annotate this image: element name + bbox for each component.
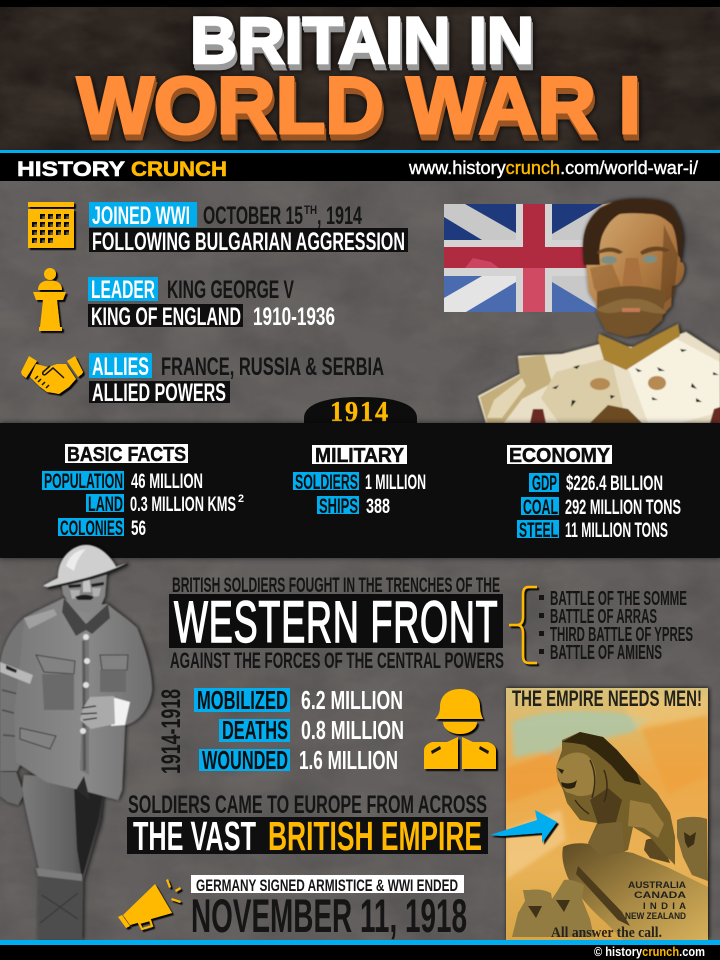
line below: AGAINST THE FORCES OF THE CENTRAL POWERS (170, 648, 504, 673)
economy: GDP (532, 472, 557, 495)
basic facts (42, 444, 244, 540)
basic facts: COLONIES (60, 517, 123, 540)
header banner (0, 0, 720, 151)
icon: lectern speaker (33, 268, 66, 331)
armband (0, 662, 33, 684)
military: 388 (366, 495, 390, 518)
buttons (80, 634, 90, 734)
economy: $226.4 BILLION (566, 472, 663, 495)
eyes and brows (597, 246, 670, 286)
dominions list: CANADA (634, 890, 686, 901)
fact: leader: 1910-1936 (253, 303, 335, 331)
hair (583, 199, 683, 265)
footer (0, 940, 720, 960)
portrait: King George V (478, 199, 720, 423)
military: MILITARY (315, 445, 405, 467)
icon: soldier (424, 689, 496, 769)
title line 2: WORLD WAR I (77, 61, 641, 151)
fact: joined WWI: OCTOBER 15 (203, 202, 303, 230)
poster caption: All answer the call. (551, 925, 662, 941)
economy (507, 445, 681, 542)
pockets (20, 655, 128, 749)
brand name: CRUNCH (131, 158, 227, 181)
basic facts: LAND (88, 493, 123, 516)
empire callout: SOLDIERS CAME TO EUROPE FROM ACROSS (128, 791, 487, 819)
casualty statistics: 0.8 MILLION (301, 715, 404, 745)
basic facts: 2 (238, 493, 244, 505)
tab: year 1914: 1914 (330, 397, 390, 428)
panel: 1914 statistics (0, 423, 720, 558)
economy: COAL (523, 496, 558, 519)
empire callout: THE VAST (133, 813, 256, 859)
basic facts: BASIC FACTS (67, 444, 186, 466)
fact: leader: LEADER (91, 276, 155, 304)
trousers (22, 775, 105, 940)
fact: joined WWI: TH (304, 203, 317, 217)
right hand and cuff (111, 697, 130, 726)
western front heading: WESTERN FRONT (174, 590, 498, 655)
armistice note (191, 875, 467, 942)
military (293, 445, 426, 518)
basic facts: 46 MILLION (131, 470, 203, 493)
fact: joined WWI: FOLLOWING BULGARIAN AGGRESSION (92, 228, 405, 256)
basic facts: POPULATION (44, 470, 123, 493)
brand bar (0, 150, 720, 181)
fact: leader: KING GEORGE V (167, 276, 294, 304)
empire callout (127, 791, 488, 859)
fact: allies (89, 353, 384, 407)
cub (644, 839, 670, 863)
tab: year 1914 (304, 397, 417, 428)
lionesses left (512, 880, 594, 937)
military: SOLDIERS (295, 471, 358, 494)
military: SHIPS (319, 495, 358, 518)
dominions list: INDIA (643, 901, 686, 912)
fact: joined WWI: , 1914 (317, 202, 362, 230)
casualty statistics: WOUNDED (202, 745, 288, 775)
flag: Union Jack (444, 204, 624, 312)
dominions list (625, 880, 686, 922)
fact: allies: ALLIES (92, 353, 149, 381)
right lioness (677, 817, 708, 881)
poster: The Empire Needs Men (506, 686, 708, 941)
lion (556, 732, 675, 865)
icon: calendar (28, 202, 74, 248)
military: 1 MILLION (365, 471, 426, 494)
empire callout: BRITISH EMPIRE (268, 813, 482, 859)
website url: www.historycrunch.com/world-war-i/ (408, 158, 698, 178)
casualty statistics: 6.2 MILLION (301, 685, 403, 715)
brand name (17, 158, 227, 181)
casualty statistics: 1.6 MILLION (299, 745, 398, 775)
fact: leader: KING OF ENGLAND (91, 303, 241, 331)
basic facts: 56 (131, 517, 146, 540)
icon: handshake (21, 356, 83, 394)
armistice note: GERMANY SIGNED ARMISTICE & WWI ENDED (196, 876, 458, 895)
copyright: © historycrunch.com (594, 945, 705, 959)
western front block (169, 574, 504, 673)
moustache (596, 299, 666, 313)
economy: ECONOMY (509, 445, 611, 467)
economy: STEEL (519, 519, 558, 542)
dominions list: AUSTRALIA (628, 880, 686, 891)
dominions list: NEW ZEALAND (625, 911, 686, 922)
casualty statistics (194, 685, 404, 775)
brand name: HISTORY (17, 158, 125, 181)
basic facts: 0.3 MILLION KMS (130, 493, 236, 516)
face (62, 570, 107, 613)
ermine robe (478, 332, 720, 423)
icon: megaphone (118, 879, 181, 929)
arrow (490, 810, 557, 843)
armistice note: NOVEMBER 11, 1918 (191, 889, 467, 942)
bracket (509, 587, 537, 663)
left hand (0, 772, 24, 805)
painted sky (506, 695, 708, 880)
gold collar (598, 324, 680, 370)
years label: 1914-1918 (156, 689, 186, 774)
list of battles (539, 588, 693, 664)
rock (562, 843, 708, 940)
casualty statistics: DEATHS (222, 715, 288, 745)
casualty statistics: MOBILIZED (197, 685, 288, 715)
beard (597, 286, 666, 337)
photo: British soldier (0, 545, 152, 940)
head (585, 201, 684, 328)
fact: allies: ALLIED POWERS (92, 379, 226, 407)
fact: leader (88, 276, 335, 331)
fact: joined WWI (89, 202, 408, 256)
fact: allies: FRANCE, RUSSIA & SERBIA (161, 353, 384, 381)
helmet (43, 545, 127, 587)
title line 1: BRITAIN IN (190, 3, 534, 77)
jacket (14, 598, 152, 800)
fact: joined WWI: JOINED WWI (92, 202, 190, 230)
left arm (0, 618, 37, 771)
